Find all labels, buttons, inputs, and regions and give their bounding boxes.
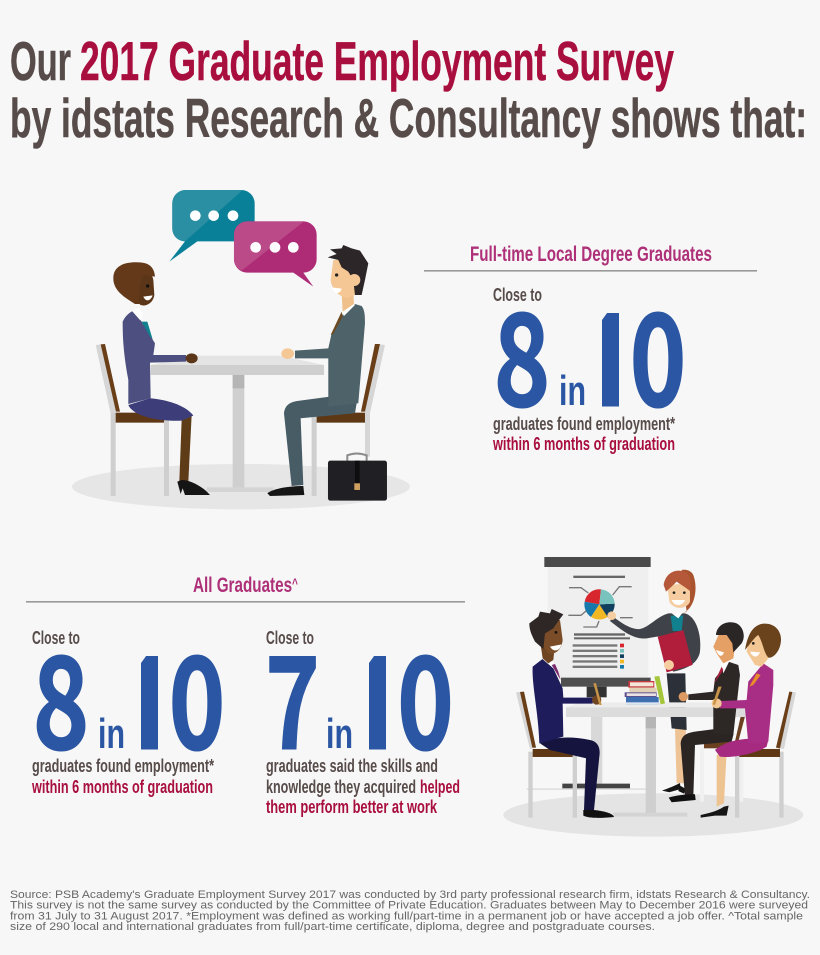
section heading: all graduates [26,574,465,603]
stat: 8 in 10 found employment, full-time local degree: graduates found employment* [493,414,675,434]
stat: 8 in 10 found employment, full-time local degree: 1 [573,258,643,443]
table [566,702,750,817]
stat: 7 in 10 performed better at work: in [326,710,353,757]
table [151,356,324,492]
stat: 7 in 10 performed better at work: 1 [340,601,410,786]
stat: 7 in 10 performed better at work: them perform better at work [266,797,438,817]
stat: 8 in 10 found employment, full-time local degree: within 6 months of graduation [492,434,675,454]
pie chart [584,589,615,620]
presentation board [527,557,651,790]
middle chair [700,717,745,802]
stat: 7 in 10 performed better at work: graduates said the skills and [266,756,438,776]
stat: 8 in 10 found employment, all graduates: 0 [168,601,226,786]
section heading: all graduates: All Graduates [193,574,330,597]
woman interviewer [113,262,210,495]
right chair [312,344,385,496]
footnote: source: This survey is not the same survey as conducted by the Committee of Private Education. Graduates between May to December 2016 were surveyed [10,900,808,912]
title: Our [10,30,71,92]
stat: 8 in 10 found employment, full-time local degree: in [559,367,586,414]
left chair [516,692,577,818]
stat: 7 in 10 performed better at work: 0 [397,601,454,786]
stat: 8 in 10 found employment, full-time local degree: Close to [493,285,542,305]
stat: 8 in 10 found employment, all graduates: Close to [32,628,80,648]
woman in magenta [701,624,781,818]
man interviewee [267,245,368,496]
stat: 8 in 10 found employment, full-time local degree: 8 [494,258,550,443]
icon: magenta speech bubble [234,221,317,287]
presenter woman [607,570,700,794]
footnote: source: from 31 July to 31 August 2017. *Employment was defined as working full/part-time in a permanent job or have accepted a job offer. ^Total sample [10,910,803,922]
stat: 7 in 10 performed better at work [266,630,460,817]
stat: 8 in 10 found employment, all graduates [32,630,222,797]
man in navy suit [529,609,614,818]
left chair [96,344,169,496]
stat: 7 in 10 performed better at work: helped [420,777,460,797]
illustration: interview at table [72,190,410,509]
footnote: source: size of 290 local and international graduates from full/part-time certificate, diploma, degree and postgraduate courses. [10,921,655,933]
books [625,676,665,704]
stat: 8 in 10 found employment, all graduates: in [98,710,125,757]
stat: 7 in 10 performed better at work: knowledge they acquired [266,777,416,797]
right chair [735,692,796,818]
stat: 8 in 10 found employment, full-time local degree [493,288,683,454]
title [10,30,807,149]
stat: 8 in 10 found employment, all graduates: 8 [32,601,90,786]
stat: 8 in 10 found employment, all graduates: within 6 months of graduation [31,777,213,797]
stat: 7 in 10 performed better at work: 7 [265,601,320,786]
stat: 8 in 10 found employment, full-time local degree: 0 [630,258,686,443]
illustration: team meeting with presentation [503,557,803,837]
icon: briefcase [328,453,387,501]
stat: 8 in 10 found employment, all graduates: 1 [112,601,182,786]
man in dark suit [669,622,744,802]
icon: teal speech bubble [169,190,255,262]
footnote: source: Source: PSB Academy's Graduate Employment Survey 2017 was conducted by 3rd party professional research firm, idstats Research & Consultancy. [10,889,810,901]
stat: 8 in 10 found employment, all graduates: graduates found employment* [32,756,214,776]
section heading: all graduates: ^ [292,575,298,591]
section heading: full-time local degree graduates: Full-time Local Degree Graduates [470,243,712,266]
stat: 7 in 10 performed better at work: Close to [266,628,314,648]
footnote: source [10,889,810,933]
